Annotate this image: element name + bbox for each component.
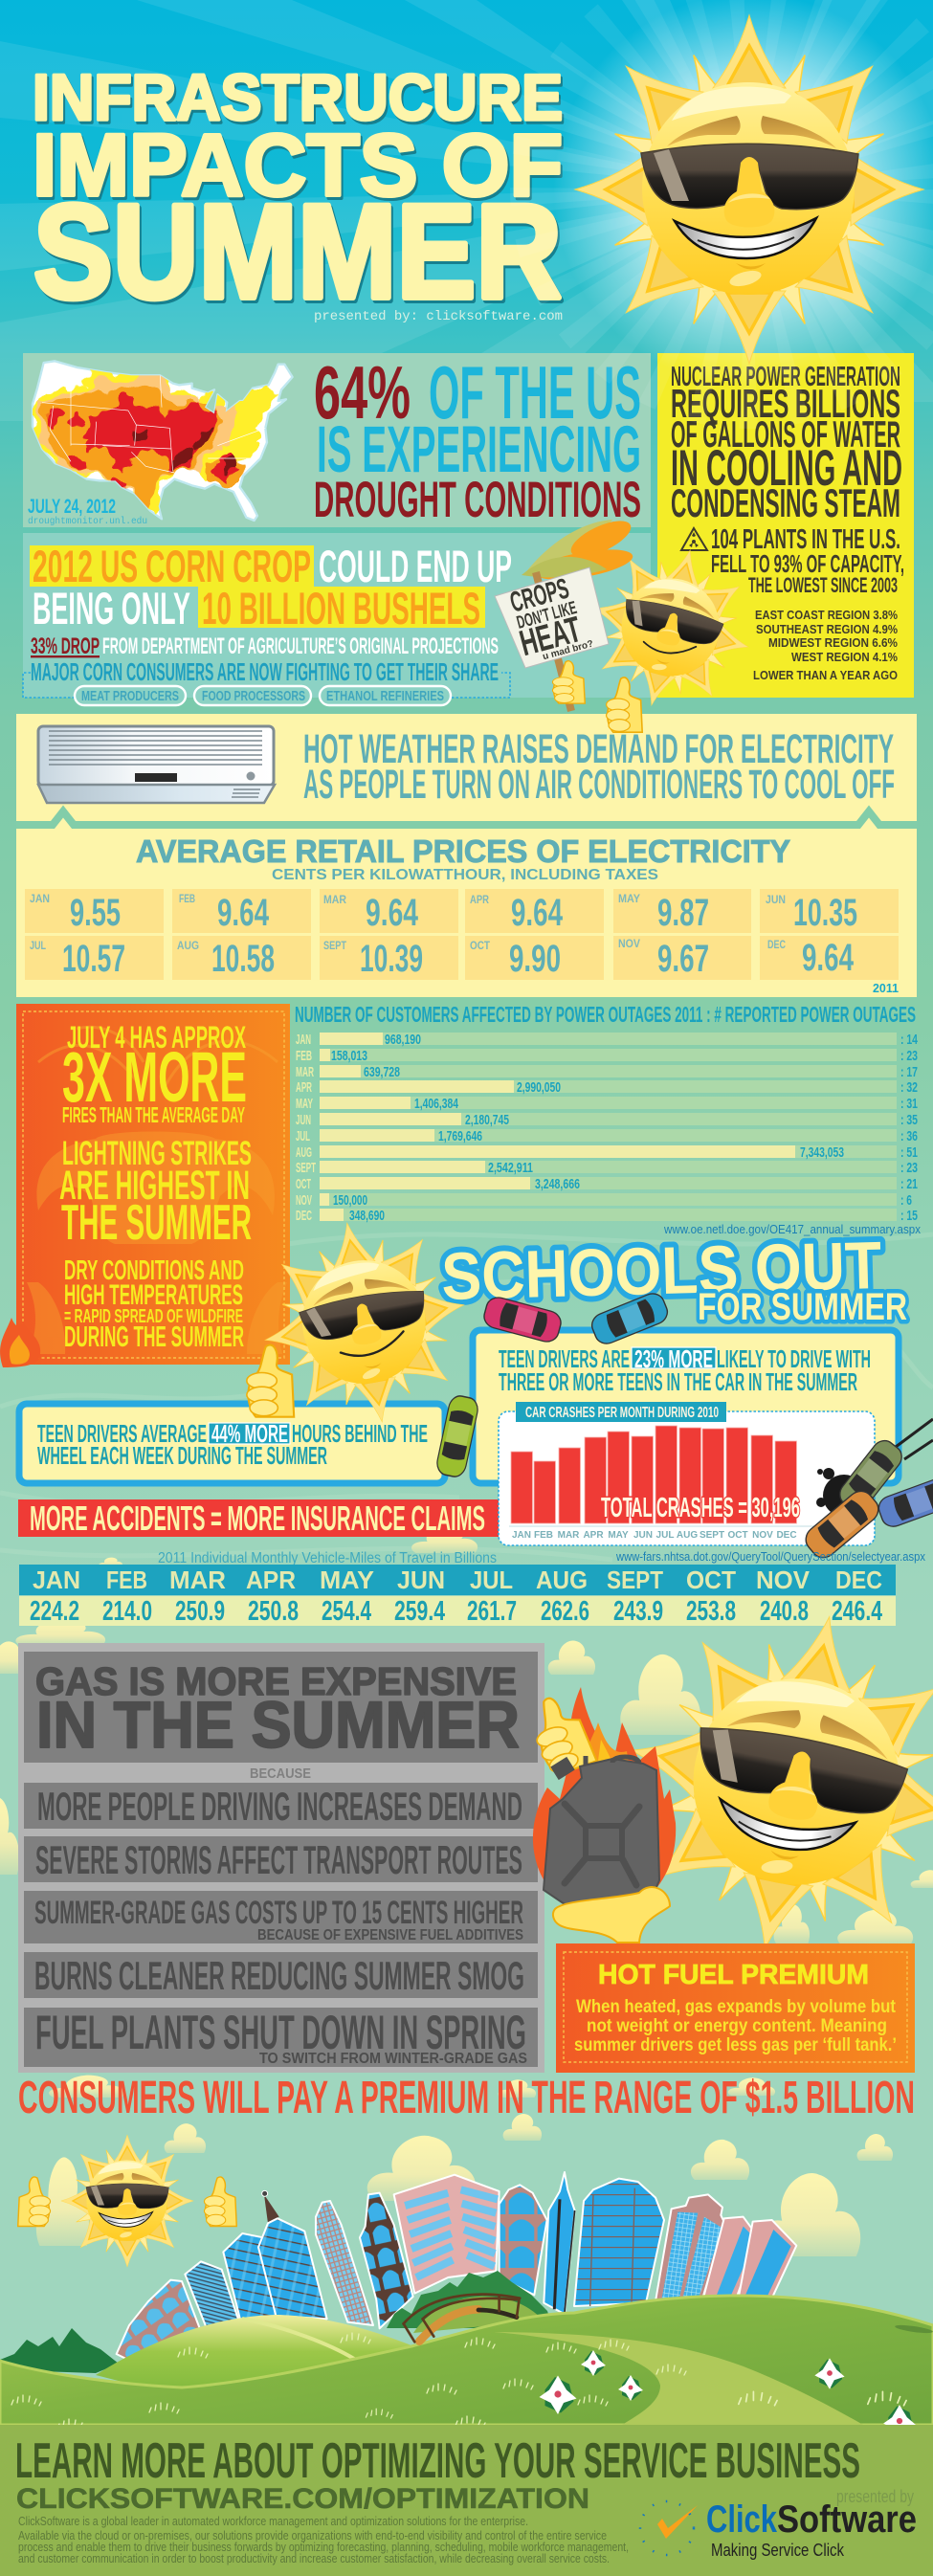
panel: gas prices — [18, 1643, 544, 2073]
icon: bridge — [404, 2295, 520, 2342]
panel: corn — [23, 533, 651, 705]
teen hours text: HOURS BEHIND THE — [292, 1419, 428, 1448]
chart reported counts: : 51 — [900, 1144, 918, 1161]
headline: 64 percent: OF THE US — [429, 350, 641, 434]
panel: nuclear: SOUTHEAST REGION 4.9% — [756, 622, 898, 636]
panel: teen drivers left — [19, 1404, 445, 1483]
chart values: 968,190 — [385, 1032, 421, 1048]
fire statistics text: JULY 4 HAS APPROX — [67, 1020, 246, 1055]
sign pole — [536, 572, 571, 711]
gas reasons: SUMMER-GRADE GAS COSTS UP TO 15 CENTS HIGHER — [34, 1895, 523, 1931]
gas rows — [24, 1652, 538, 2067]
corn headline: BEING ONLY — [33, 583, 190, 633]
table: vehicle miles: 250.9 — [175, 1596, 225, 1627]
crash months: SEPT — [700, 1530, 724, 1541]
gas reasons — [34, 1784, 527, 2067]
price grid: JUN — [766, 893, 786, 906]
map date: JULY 24, 2012 — [28, 496, 116, 518]
price grid: SEPT — [323, 939, 347, 952]
sign: crops don't like heat: u mad bro? — [542, 638, 594, 662]
crash months: APR — [583, 1530, 604, 1541]
price grid: 9.64 — [511, 892, 564, 934]
footer description: and customer communication in order to boost productivity and increase customer satisfaction, while decreasing overall service costs. — [18, 2552, 610, 2565]
sun: thumbs up mascot — [18, 2135, 236, 2267]
chart reported counts: : 15 — [900, 1208, 918, 1224]
drop statistic — [31, 633, 499, 659]
fire statistics text: HIGH TEMPERATURES — [64, 1279, 243, 1311]
fire statistics text: = RAPID SPREAD OF WILDFIRE — [64, 1306, 243, 1327]
map source: droughtmonitor.unl.edu — [28, 516, 147, 527]
sign: crops don't like heat: CROPS — [507, 573, 572, 619]
table: vehicle miles — [19, 1565, 896, 1627]
chart values: 1,769,646 — [438, 1128, 482, 1144]
price grid: 9.64 — [217, 892, 270, 934]
crash months: FEB — [534, 1530, 553, 1541]
chart: power outages — [295, 1002, 921, 1236]
fire statistics text: THE SUMMER — [61, 1195, 252, 1251]
crash chart title: CAR CRASHES PER MONTH DURING 2010 — [525, 1405, 719, 1421]
chart months: AUG — [296, 1144, 312, 1161]
map: drought monitor — [33, 361, 293, 521]
price grid: 9.67 — [657, 938, 709, 980]
crash months: MAR — [558, 1530, 580, 1541]
table: vehicle miles: OCT — [686, 1566, 736, 1594]
table: vehicle miles: SEPT — [607, 1566, 663, 1594]
chart reported counts: : 6 — [900, 1192, 912, 1209]
headline: 64 percent: 64% — [314, 350, 411, 434]
table: vehicle miles: 259.4 — [394, 1596, 445, 1627]
sign: crops don't like heat — [495, 567, 609, 668]
price grid: 9.87 — [657, 892, 709, 934]
subheading: CENTS PER KILOWATTHOUR, INCLUDING TAXES — [272, 867, 658, 883]
price grid: 10.58 — [211, 938, 275, 980]
sun: gas mascot — [599, 1585, 933, 1981]
sun: schools mascot — [247, 1206, 481, 1439]
banner: insurance claims — [18, 1499, 507, 1538]
chart reported counts: : 23 — [900, 1160, 918, 1176]
table: vehicle miles: NOV — [756, 1566, 811, 1594]
logo: clicksoftware: Click — [706, 2498, 778, 2541]
table: vehicle miles: 250.8 — [248, 1596, 299, 1627]
chart values: 639,728 — [364, 1064, 400, 1080]
table: vehicle miles: 246.4 — [832, 1596, 882, 1627]
hot fuel heading: HOT FUEL PREMIUM — [598, 1960, 869, 1990]
consumer pills: MEAT PRODUCERS — [81, 689, 179, 704]
decoration: fireworks and flames — [27, 1131, 287, 1354]
chart values: 158,013 — [331, 1048, 367, 1064]
crash months: JUN — [633, 1530, 653, 1541]
illustration: hills — [0, 2296, 933, 2425]
footer description: ClickSoftware is a global leader in automated workforce management and optimization solutions for the enterprise. — [18, 2515, 528, 2528]
headline: drought conditions: DROUGHT CONDITIONS — [314, 472, 641, 528]
table: vehicle miles: 243.9 — [613, 1596, 663, 1627]
illustration: bushes — [0, 2271, 553, 2373]
table: vehicle miles: 262.6 — [541, 1596, 589, 1627]
road tracks texture — [0, 1234, 933, 1560]
table: vehicle miles: 254.4 — [322, 1596, 371, 1627]
price grid: 9.90 — [509, 938, 561, 980]
chart reported counts — [900, 1032, 918, 1224]
chart values: 3,248,666 — [535, 1176, 580, 1192]
footer — [0, 2425, 933, 2576]
price grid: 9.64 — [366, 892, 419, 934]
fire statistics text: ARE HIGHEST IN — [59, 1163, 250, 1209]
footer description: process and enable them to drive their business forwards by optimizing forecasting, planning, scheduling, mobile workforce management, — [18, 2541, 629, 2554]
chart months: MAR — [296, 1064, 314, 1080]
illustration: city skyline — [117, 2172, 796, 2361]
panel: nuclear: LOWER THAN A YEAR AGO — [753, 668, 898, 682]
chart values: 150,000 — [333, 1192, 367, 1209]
crash bars — [511, 1426, 796, 1523]
highlight box — [209, 1423, 290, 1444]
gas reasons: BURNS CLEANER REDUCING SUMMER SMOG — [34, 1953, 524, 1998]
fire statistics text: DURING THE SUMMER — [64, 1320, 244, 1353]
chart values: 7,343,053 — [800, 1144, 844, 1161]
chart values: 2,180,745 — [465, 1112, 509, 1128]
teen hours text: WHEEL EACH WEEK DURING THE SUMMER — [37, 1441, 327, 1470]
crash months — [512, 1530, 797, 1541]
heading: schools out: SCHOOLS OUT — [440, 1228, 882, 1314]
gas heading: GAS IS MORE EXPENSIVE — [35, 1659, 517, 1703]
table: vehicle miles: JUN — [397, 1566, 445, 1594]
footer description: Available via the cloud or on-premises, our solutions provide organizations with end-to-end visibility and control of the entire service — [18, 2529, 607, 2543]
icon: blue car — [589, 1290, 671, 1347]
chart months: JUN — [296, 1112, 311, 1128]
headline: experiencing: IS EXPERIENCING — [317, 412, 641, 486]
hot fuel body — [574, 1997, 897, 2055]
crash months: OCT — [727, 1530, 748, 1541]
clouds mid page — [0, 1526, 933, 2098]
banner: insurance claims: MORE ACCIDENTS = MORE INSURANCE CLAIMS — [30, 1499, 485, 1538]
crash months: JUL — [656, 1530, 674, 1541]
table: vehicle miles: APR — [246, 1566, 296, 1594]
corn highlight boxes — [30, 545, 485, 628]
chart months: DEC — [296, 1208, 312, 1224]
price grid: 10.39 — [360, 938, 423, 980]
panel: air conditioning — [16, 714, 917, 997]
drop statistic: FROM DEPARTMENT OF AGRICULTURE’S ORIGINAL PROJECTIONS — [102, 633, 499, 659]
sign: crops don't like heat: DON’T LIKE — [515, 598, 579, 633]
price grid: JUL — [30, 939, 46, 952]
crash months: NOV — [752, 1530, 773, 1541]
chart reported counts: : 32 — [900, 1079, 918, 1096]
price grid: 9.64 — [802, 937, 855, 979]
crash months: AUG — [677, 1530, 698, 1541]
hot fuel body: summer drivers get less gas per ‘full tank.’ — [574, 2035, 897, 2055]
price grid: OCT — [470, 939, 491, 952]
panel: nuclear: EAST COAST REGION 3.8% — [755, 608, 898, 622]
chart reported counts: : 31 — [900, 1096, 918, 1112]
table: vehicle miles: MAY — [320, 1566, 374, 1594]
fire statistics text: LIGHTNING STRIKES — [62, 1135, 252, 1172]
teen hours text — [37, 1419, 428, 1470]
price grid: 10.35 — [793, 892, 857, 934]
teen stat text — [499, 1344, 871, 1396]
presented by: presented by: clicksoftware.com — [314, 309, 563, 324]
clouds over city — [36, 2114, 893, 2256]
gas heading — [35, 1659, 520, 1762]
table: vehicle miles: 240.8 — [760, 1596, 809, 1627]
logo: clicksoftware: Making Service Click — [711, 2541, 845, 2560]
panel: nuclear: MIDWEST REGION 6.6% — [768, 635, 898, 650]
icon: flaming gas can — [524, 1687, 676, 1943]
table: vehicle miles: 261.7 — [467, 1596, 517, 1627]
table: vehicle miles: 214.0 — [102, 1596, 152, 1627]
chart reported counts: : 36 — [900, 1128, 918, 1144]
corn consumers heading: MAJOR CORN CONSUMERS ARE NOW FIGHTING TO GET THEIR SHARE — [31, 657, 499, 686]
year label: 2011 — [873, 982, 899, 995]
table: vehicle miles: JAN — [33, 1566, 80, 1594]
icon: green car — [434, 1394, 480, 1478]
table: vehicle miles: FEB — [106, 1566, 147, 1594]
corn headline: 2012 US CORN CROP — [33, 541, 311, 591]
title: SUMMER — [33, 176, 562, 326]
fire statistics text: DRY CONDITIONS AND — [64, 1255, 244, 1286]
gas heading: IN THE SUMMER — [36, 1688, 520, 1762]
dashed inset — [23, 1011, 284, 1358]
decoration: grass tufts and flowers — [11, 2333, 916, 2438]
icon: radiation — [681, 528, 707, 550]
icon: crashed cars — [801, 1419, 933, 1563]
chart months: APR — [296, 1079, 312, 1096]
chart months: SEPT — [296, 1160, 316, 1176]
footer url: CLICKSOFTWARE.COM/OPTIMIZATION — [16, 2483, 589, 2515]
crash months: JAN — [512, 1530, 531, 1541]
table: vehicle miles: JUL — [470, 1566, 513, 1594]
footer description — [18, 2515, 629, 2565]
fire statistics text: FIRES THAN THE AVERAGE DAY — [62, 1102, 245, 1127]
gas reasons: TO SWITCH FROM WINTER-GRADE GAS — [259, 2051, 527, 2067]
icon: hands holding sign — [552, 661, 642, 732]
table: vehicle miles: DEC — [835, 1566, 882, 1594]
chart months: JUL — [296, 1128, 310, 1144]
heading: electricity prices: AVERAGE RETAIL PRICES OF ELECTRICITY — [136, 833, 790, 869]
chart: car crashes — [499, 1402, 875, 1545]
teen hours text: 44% MORE — [211, 1419, 288, 1448]
panel: teen drivers right — [473, 1330, 899, 1483]
sun: crops mascot — [574, 531, 767, 724]
logo: clicksoftware — [640, 2487, 917, 2560]
fire statistics text — [59, 1020, 252, 1353]
gas reasons: BECAUSE OF EXPENSIVE FUEL ADDITIVES — [257, 1927, 523, 1943]
consumer pills — [75, 686, 451, 705]
price grid: APR — [470, 893, 489, 906]
crash chart title — [516, 1402, 726, 1422]
drop statistic: 33% DROP — [31, 633, 100, 659]
corn headline: 10 BILLION BUSHELS — [202, 583, 480, 633]
icon: corn cobs — [522, 514, 635, 586]
price grid: JAN — [30, 892, 50, 905]
panel: drought — [23, 350, 651, 528]
icon: air conditioner — [38, 726, 275, 803]
chart months — [296, 1032, 316, 1224]
table: vehicle miles: AUG — [536, 1566, 588, 1594]
crash months: DEC — [776, 1530, 797, 1541]
logo: clicksoftware: presented by — [836, 2487, 914, 2506]
price grid: 10.57 — [62, 938, 125, 980]
chart values — [331, 1032, 844, 1224]
gas reasons: FUEL PLANTS SHUT DOWN IN SPRING — [35, 2006, 526, 2059]
price grid: AUG — [177, 939, 199, 952]
fire statistics text: 3X MORE — [62, 1037, 247, 1117]
dashed consumers frame — [23, 673, 510, 698]
consumer pills: ETHANOL REFINERIES — [326, 689, 444, 704]
chart months: FEB — [296, 1048, 312, 1064]
divider with carets — [16, 811, 917, 825]
price grid: NOV — [618, 937, 640, 950]
chart months: NOV — [296, 1192, 312, 1209]
chart values: 2,542,911 — [488, 1160, 533, 1176]
teen stat text: 23% MORE — [634, 1344, 713, 1373]
chart bars — [320, 1033, 795, 1221]
chart values: 1,406,384 — [414, 1096, 458, 1112]
highlight box — [632, 1347, 716, 1368]
hot fuel body: not weight or energy content. Meaning — [587, 2016, 887, 2036]
corn headline — [33, 541, 512, 633]
because label: BECAUSE — [250, 1766, 311, 1782]
price grid: MAR — [323, 893, 346, 906]
hot fuel body: When heated, gas expands by volume but — [576, 1997, 897, 2017]
chart reported counts: : 17 — [900, 1064, 918, 1080]
title: INFRASTRUCURE — [33, 61, 563, 134]
icon: pink car — [481, 1295, 564, 1344]
price grid: DEC — [767, 938, 786, 951]
price grid: MAY — [618, 892, 640, 905]
title: IMPACTS OF — [33, 117, 563, 214]
price grid — [25, 889, 899, 980]
teen hours text: TEEN DRIVERS AVERAGE — [37, 1419, 207, 1448]
sign: crops don't like heat: HEAT — [516, 610, 586, 664]
gas reasons: MORE PEOPLE DRIVING INCREASES DEMAND — [37, 1784, 522, 1829]
chart months: JAN — [296, 1032, 311, 1048]
panel: hot fuel premium — [556, 1943, 915, 2073]
table: vehicle miles: 253.8 — [686, 1596, 736, 1627]
chart reported counts: : 23 — [900, 1048, 918, 1064]
background sun rays — [0, 0, 933, 421]
icon: flame — [0, 1318, 40, 1367]
chart months: MAY — [296, 1096, 313, 1112]
consumer pills: FOOD PROCESSORS — [202, 689, 305, 704]
price grid: FEB — [179, 892, 195, 905]
corn headline: COULD END UP — [319, 541, 512, 591]
chart tracks — [320, 1033, 897, 1221]
panel: fires — [16, 1004, 290, 1365]
chart reported counts: : 21 — [900, 1176, 918, 1192]
title — [33, 61, 563, 326]
chart months: OCT — [296, 1176, 311, 1192]
table: vehicle miles: 224.2 — [30, 1596, 79, 1627]
chart values: 2,990,050 — [517, 1079, 561, 1096]
table: vehicle miles: MAR — [169, 1566, 226, 1594]
teen stat text: TEEN DRIVERS ARE — [499, 1344, 630, 1373]
chart values: 348,690 — [349, 1208, 385, 1224]
panel: nuclear: WEST REGION 4.1% — [791, 650, 898, 664]
sun: header mascot — [553, 0, 933, 386]
panel: nuclear — [657, 353, 914, 698]
price grid: 9.55 — [70, 892, 121, 934]
chart reported counts: : 35 — [900, 1112, 918, 1128]
chart reported counts: : 14 — [900, 1032, 918, 1048]
miles table title: 2011 Individual Monthly Vehicle-Miles of Travel in Billions — [158, 1550, 497, 1566]
crash months: MAY — [608, 1530, 629, 1541]
